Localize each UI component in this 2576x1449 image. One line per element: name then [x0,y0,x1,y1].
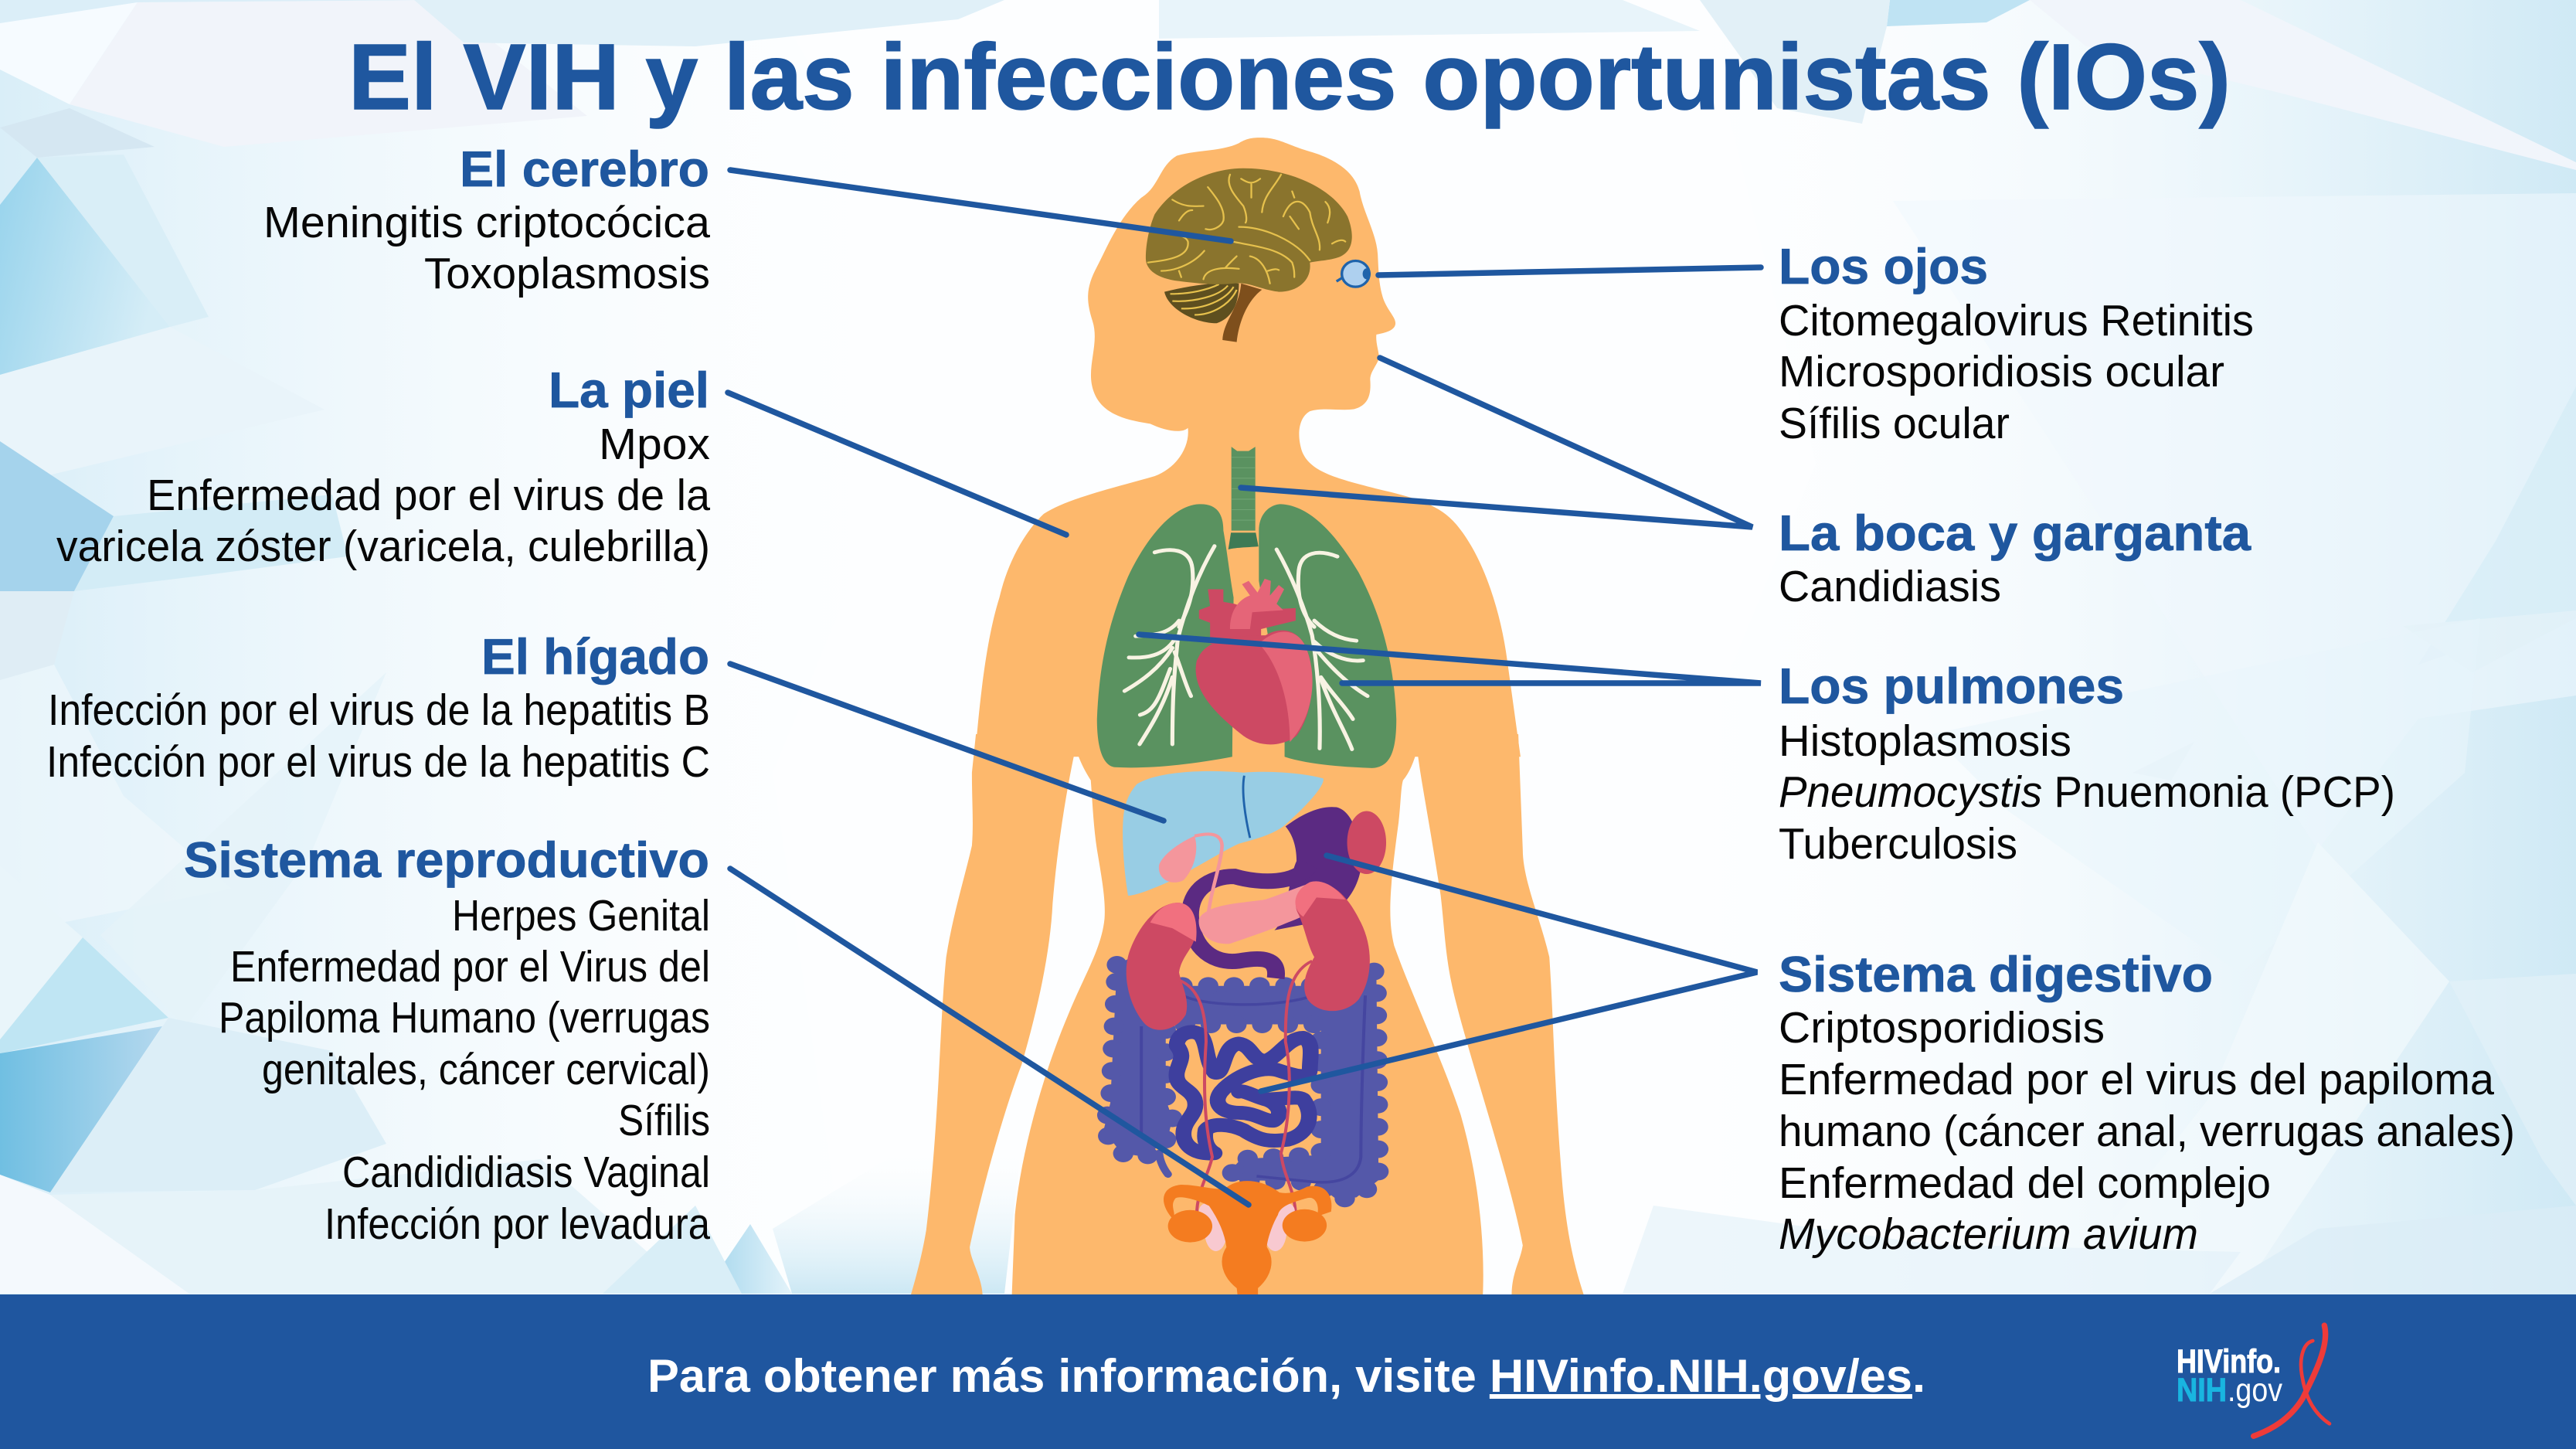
text block [56,420,710,571]
footer bar [0,1294,2576,1449]
text block: Microsporidiosis ocular [1779,347,2224,396]
liver fissure [1243,776,1250,838]
heading: Sistema digestivo [1779,946,2213,1002]
lines: boca y garganta [1241,358,1752,527]
stomach [1274,807,1361,930]
bronchi [1124,546,1368,750]
text block [1779,716,2395,869]
text block: varicela zóster (varicela, culebrilla) [56,522,710,571]
text block: Enfermedad por el Virus del [230,942,710,992]
lungs and trachea [1097,447,1396,768]
text block: Enfermedad por el virus del papiloma [1779,1055,2494,1104]
liver [1123,771,1324,896]
line: cerebro [730,170,1231,241]
text block [263,198,710,298]
right kidney [1296,884,1370,1011]
ovaries [1168,1209,1327,1243]
text block: Candididiasis Vaginal [342,1148,710,1197]
text block [219,891,710,1249]
panel: La piel [56,362,710,571]
eye [1337,261,1371,287]
text block: Sífilis [618,1096,710,1145]
text block: Candidiasis [1779,562,2001,611]
text block: Infección por el virus de la hepatitis B [48,685,710,735]
text block: Enfermedad por el virus de la [147,471,710,520]
text block: Tuberculosis [1779,819,2017,869]
body silhouette: torso, arms and hips [911,734,1584,1295]
right lung [1259,504,1396,768]
text block [46,685,710,787]
uterus and fallopian tubes [1165,1182,1330,1295]
logo: HIVinfo.NIH.gov with red ribbon [2177,1325,2330,1436]
trachea bifurcation [1229,532,1259,549]
line: higado [730,664,1164,821]
icon: red ribbon [2254,1325,2330,1436]
title: El VIH y las infecciones oportunistas (IOs) [348,24,2231,129]
ovarian pink tissue [1199,1203,1295,1251]
heading: El hígado [481,628,709,685]
logo: HIVinfo.NIH.gov with red ribbon: NIH [2177,1372,2227,1409]
heading: Los pulmones [1779,658,2124,714]
cerebellum [1164,283,1239,323]
text block: Enfermedad del complejo [1779,1158,2271,1208]
heading: Sistema reproductivo [184,832,709,888]
panel: Los ojos [1779,238,2254,448]
text block: Criptosporidiosis [1779,1003,2105,1053]
text block: Histoplasmosis [1779,716,2071,766]
appendix [1159,1153,1168,1175]
duodenum [1190,865,1310,978]
heading: La boca y garganta [1779,505,2251,561]
footer text: Para obtener más información, visite HIVinfo.NIH.gov/es. [647,1350,1925,1402]
text block: Papiloma Humano (verrugas [219,993,710,1043]
line: piel [728,393,1066,535]
panel: El cerebro [263,141,710,298]
text block: Infección por levadura [325,1199,710,1249]
line: reproductivo [730,869,1249,1205]
bile duct [1195,834,1222,919]
text block [1779,296,2254,448]
heading: La piel [549,362,709,418]
text block: Infección por el virus de la hepatitis C [46,737,710,787]
text block: Herpes Genital [452,891,710,940]
text block: Sífilis ocular [1779,399,2010,448]
abdominal organs [1103,771,1386,1295]
panel: Los pulmones [1779,658,2395,869]
text block: Toxoplasmosis [424,249,710,298]
panel: La boca y garganta [1779,505,2251,611]
leader lines [728,170,1761,1205]
text block: Citomegalovirus Retinitis [1779,296,2254,345]
brain [1146,168,1352,342]
line: ojos [1378,267,1761,275]
logo: HIVinfo.NIH.gov with red ribbon: .gov [2228,1372,2282,1409]
text block: Mpox [599,420,710,469]
body silhouette: upper body and head [975,138,1521,757]
heart [1196,579,1313,744]
panel: Sistema digestivo [1779,946,2515,1259]
left kidney [1127,903,1196,1030]
heading: El cerebro [460,141,709,197]
logo: HIVinfo.NIH.gov with red ribbon: HIVinfo. [2177,1343,2281,1380]
lines: pulmones [1139,634,1761,683]
brain folds [1148,175,1345,284]
text block [1779,1003,2515,1259]
gallbladder [1159,836,1196,883]
brain stem [1222,284,1262,342]
trachea [1232,447,1256,531]
lines: digestivo [1261,855,1757,1091]
colon [1103,959,1378,1199]
pancreas [1199,882,1332,944]
panel: El hígado [46,628,710,787]
cerebrum [1146,168,1352,292]
small intestine [1177,1032,1310,1153]
text block: Meningitis criptocócica [263,198,710,247]
text block: Mycobacterium avium [1779,1209,2198,1259]
spleen [1347,811,1386,874]
ureters [1179,961,1312,1215]
heading: Los ojos [1779,238,1988,294]
colon inner lines [1141,995,1365,1182]
left lung [1097,504,1234,767]
text block: Pneumocystis Pnuemonia (PCP) [1779,767,2395,817]
text block: humano (cáncer anal, verrugas anales) [1779,1107,2515,1156]
panel: Sistema reproductivo [184,832,710,1249]
text block: genitales, cáncer cervical) [262,1045,710,1094]
